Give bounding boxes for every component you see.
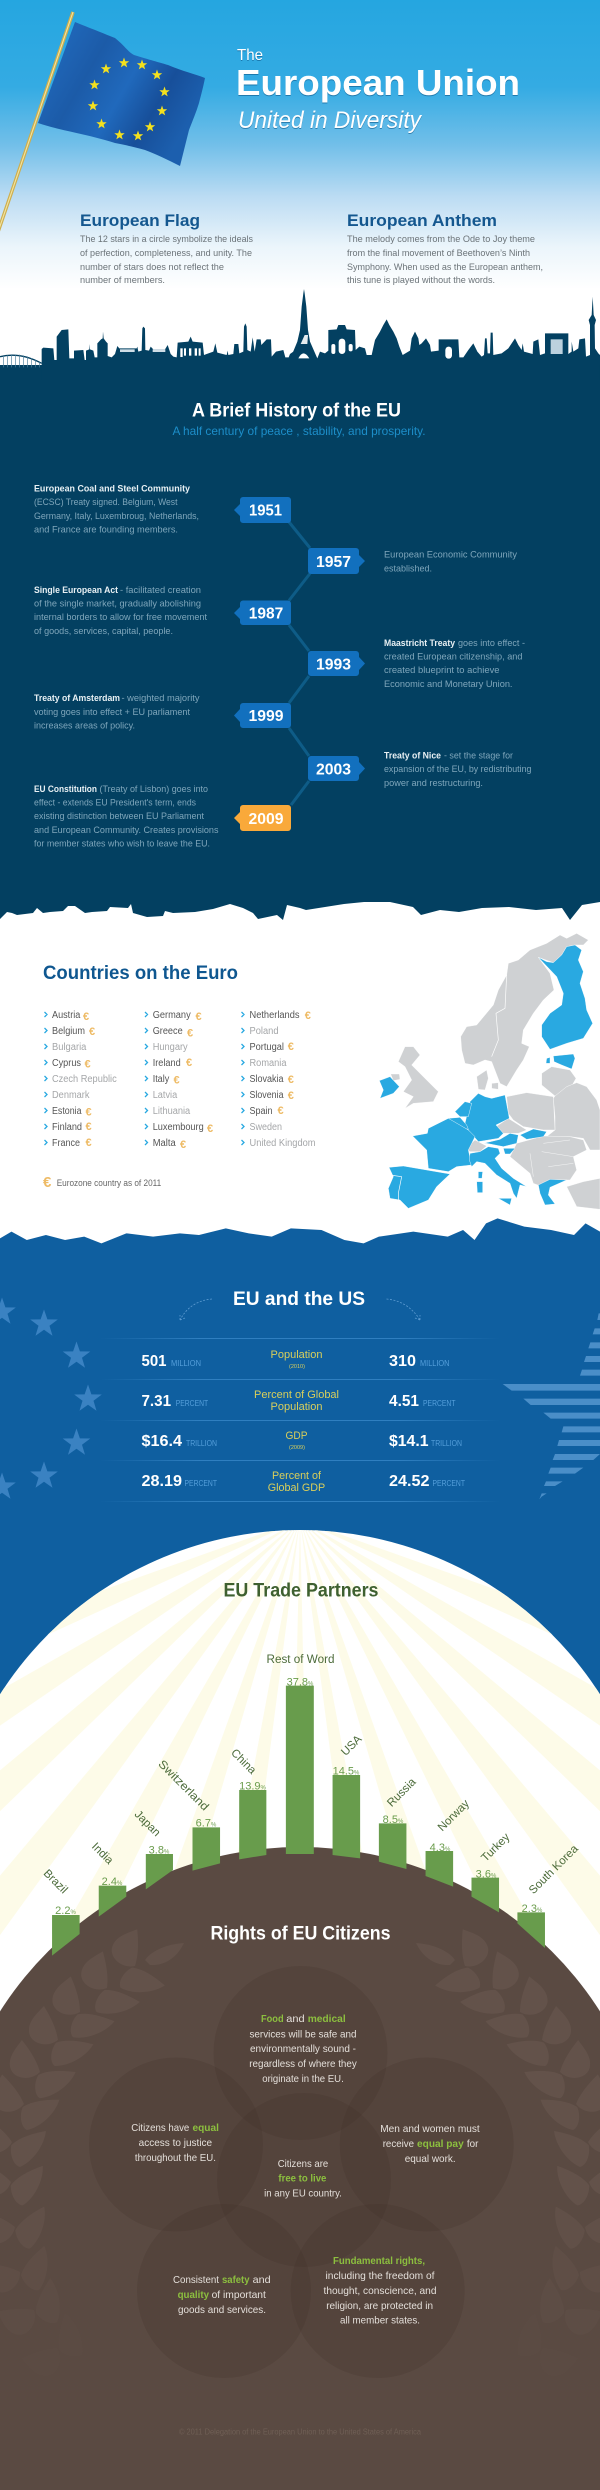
row: population: MILLION — [420, 1358, 450, 1368]
country column 1: € — [86, 1121, 92, 1133]
bar labels: Norway — [436, 1798, 472, 1834]
year marker: 1993: 1993 — [316, 656, 351, 674]
row: percent of global population — [142, 1389, 456, 1413]
text: food and medical: medical — [308, 2013, 346, 2025]
text block: European Anthem: European Anthem — [347, 211, 497, 230]
row: population — [142, 1349, 450, 1370]
text: free to live: free to live — [278, 2172, 327, 2184]
text block: European Flag: number of stars does not reflect the — [80, 262, 224, 273]
heading: A Brief History of the EU — [192, 400, 401, 422]
text block: European Anthem: this tune is played without the words. — [347, 275, 495, 286]
bar labels: Rest of Word — [266, 1654, 334, 1666]
text: Treaty of Amsterdam 1999: voting goes into effect + EU parliament — [34, 707, 190, 718]
text: equal justice: equal — [192, 2122, 219, 2134]
list chevrons — [44, 1012, 244, 1145]
venn circles — [89, 1966, 514, 2378]
country column 3: Slovakia — [250, 1074, 284, 1085]
country column 3: Romania — [250, 1058, 287, 1069]
text: fundamental rights: including the freedom of — [326, 2270, 435, 2282]
country column 1: Estonia — [52, 1106, 82, 1117]
text: fundamental rights: thought, conscience, and — [324, 2285, 437, 2297]
year marker: 1999: 1999 — [248, 708, 284, 725]
row: percent of global population: 4.51 — [389, 1393, 419, 1410]
text: equal pay — [380, 2123, 480, 2165]
text: Treaty of Nice 2003 — [384, 750, 532, 789]
text: Single European Act 1987: Single European Act — [34, 585, 119, 596]
panel: EU and the US — [0, 1289, 600, 1502]
country column 1: € — [84, 1058, 91, 1070]
row: GDP: TRILLION — [186, 1438, 217, 1448]
panel: EU trade partners — [41, 1580, 581, 1956]
text: equal pay: equal work. — [405, 2153, 456, 2165]
text: Maastricht Treaty 1993: goes into effect - — [458, 638, 525, 649]
country column 1: Cyprus — [52, 1058, 81, 1069]
country column 2: Malta — [153, 1138, 176, 1149]
title: United in Diversity — [238, 107, 423, 134]
text: Single European Act 1987: of goods, services, capital, people. — [34, 626, 173, 637]
bar values: 6.7% — [196, 1818, 217, 1830]
text block: European Anthem — [347, 211, 543, 286]
country column 1: Belgium — [52, 1026, 85, 1037]
year marker: 1987: 1987 — [249, 606, 283, 622]
year marker: 1957 — [308, 548, 365, 574]
text block: European Flag: number of members. — [80, 275, 165, 286]
title — [236, 47, 520, 134]
year marker: 2003: 2003 — [316, 762, 351, 778]
text: equal justice: Citizens have — [131, 2122, 189, 2134]
bar labels: Turkey — [479, 1831, 513, 1864]
text: EU Constitution 2009: effect - extends EU President's term, ends — [34, 798, 196, 808]
title: European Union — [236, 62, 520, 103]
country column 3: Poland — [250, 1026, 278, 1037]
heading: EU Trade Partners — [224, 1580, 378, 1602]
row: percent of global population: 7.31 — [142, 1393, 171, 1410]
text: EU Constitution 2009: EU Constitution — [34, 784, 97, 795]
country column 1: € — [83, 1011, 89, 1023]
footer credit: © 2011 Delegation of the European Union to the United States of America — [179, 2428, 422, 2436]
bar chart — [52, 1686, 545, 1956]
year marker: 2009 — [234, 805, 291, 831]
heading: Countries on the Euro — [43, 963, 238, 984]
text: safety and quality: goods and services. — [178, 2304, 266, 2316]
country column 2: € — [180, 1139, 186, 1151]
text: food and medical — [249, 2013, 357, 2085]
country column 3: Spain — [250, 1106, 272, 1117]
text: equal justice: access to justice — [139, 2137, 212, 2149]
map of Europe — [379, 933, 600, 1209]
table row lines — [100, 1338, 500, 1502]
text: Treaty of Nice 2003: - set the stage for — [444, 750, 513, 762]
bar labels: USA — [339, 1733, 365, 1758]
row: population: Population — [270, 1349, 322, 1361]
text: food and medical: environmentally sound - — [250, 2043, 356, 2055]
text: Single European Act 1987: internal borders to allow for free movement — [34, 612, 207, 623]
bar labels: Switzerland — [156, 1758, 211, 1813]
row: population: MILLION — [171, 1358, 201, 1368]
text: fundamental rights: Fundamental rights, — [333, 2255, 425, 2267]
year marker: 2009: 2009 — [248, 811, 284, 828]
text: Treaty of Nice 2003: expansion of the EU, by redistributing — [384, 764, 532, 775]
bar labels: India — [89, 1841, 116, 1867]
bar values: 4.3% — [430, 1842, 451, 1854]
text: equal justice — [131, 2122, 219, 2164]
panel: rights of EU citizens — [0, 1924, 600, 2436]
text: fundamental rights: religion, are protected in — [326, 2300, 433, 2312]
bar labels — [41, 1654, 581, 1897]
bar values: 3.8% — [149, 1844, 170, 1856]
row: percent of global population: PERCENT — [176, 1398, 208, 1408]
country column 3: € — [288, 1074, 294, 1086]
legend — [43, 1174, 161, 1191]
row: GDP: TRILLION — [431, 1438, 462, 1448]
text: Maastricht Treaty 1993: created European citizenship, and — [384, 652, 522, 662]
country column 3: € — [278, 1105, 284, 1117]
row: GDP: $16.4 — [142, 1433, 182, 1450]
text: equal pay: Men and women must — [380, 2123, 480, 2135]
country column 2: Luxembourg — [153, 1122, 204, 1133]
country column 1: Finland — [52, 1122, 82, 1133]
non-euro countries — [391, 933, 600, 1209]
year marker: 1957: 1957 — [316, 554, 351, 571]
text: ECSC 1951: and France are founding members. — [34, 524, 178, 536]
text: ECSC 1951 — [34, 484, 199, 536]
text: ECSC 1951: Germany, Italy, Luxembroug, Netherlands, — [34, 511, 199, 522]
row: GDP — [142, 1430, 462, 1451]
text: equal pay: for — [467, 2138, 479, 2150]
country column 3 — [250, 1010, 316, 1149]
year marker: 2003 — [308, 756, 365, 781]
text: Single European Act 1987: - facilitated creation — [120, 585, 201, 596]
legend: € — [43, 1174, 52, 1191]
text: Maastricht Treaty 1993: Economic and Monetary Union. — [384, 679, 512, 690]
bar values: 2.2% — [55, 1905, 76, 1917]
bar values: 14.5% — [333, 1766, 360, 1778]
bar labels: Japan — [132, 1809, 162, 1839]
heading: Rights of EU Citizens — [210, 1924, 390, 1944]
text: EEC 1957: European Economic Community — [384, 550, 517, 560]
text: safety and quality: safety — [222, 2274, 250, 2286]
country column 1: Czech Republic — [52, 1074, 117, 1085]
text: EEC 1957 — [384, 550, 517, 574]
bar values — [55, 1676, 543, 1917]
row: percent of global GDP — [142, 1470, 465, 1494]
country column 1 — [52, 1010, 117, 1149]
bar values: 2.4% — [102, 1876, 123, 1888]
text: Treaty of Nice 2003: Treaty of Nice — [384, 750, 441, 762]
country column 2: Latvia — [153, 1090, 178, 1101]
row: percent of global GDP: PERCENT — [184, 1478, 217, 1488]
bar values: 2.3% — [522, 1903, 543, 1915]
text block: European Flag: European Flag — [80, 211, 200, 230]
country column 2: Italy — [153, 1074, 169, 1085]
bar values: 8.5% — [383, 1814, 404, 1826]
row: percent of global population: Population — [270, 1401, 322, 1413]
country column 3: Portugal — [250, 1042, 284, 1053]
year marker: 1951 — [234, 497, 291, 523]
bar labels: Brazil — [41, 1867, 70, 1896]
text: ECSC 1951: European Coal and Steel Community — [34, 484, 191, 494]
country column 1: Bulgaria — [52, 1042, 87, 1053]
text: EU Constitution 2009: existing distinction between EU Parliament — [34, 811, 204, 822]
row: percent of global GDP: Global GDP — [268, 1482, 325, 1494]
bar labels: China — [228, 1747, 258, 1777]
arrow: to US — [386, 1299, 420, 1320]
text: Single European Act 1987: of the single market, gradually abolishing — [34, 598, 201, 610]
text: fundamental rights: all member states. — [340, 2314, 420, 2326]
text: fundamental rights — [324, 2255, 437, 2326]
text: food and medical: services will be safe and — [250, 2028, 357, 2040]
row: percent of global GDP: 24.52 — [389, 1473, 430, 1490]
bar labels: South Korea — [527, 1843, 581, 1897]
row: population: 310 — [389, 1353, 416, 1370]
country column 3: € — [288, 1041, 294, 1053]
row: percent of global GDP: Percent of — [272, 1470, 322, 1482]
text: equal justice: throughout the EU. — [135, 2152, 216, 2164]
text block: European Flag — [80, 211, 253, 286]
country column 2 — [153, 1010, 213, 1151]
panel: brief history — [34, 400, 532, 850]
row: percent of global population: PERCENT — [423, 1398, 456, 1408]
wreath left — [0, 1924, 184, 2420]
text: Single European Act 1987 — [34, 585, 207, 637]
text: EU Constitution 2009 — [34, 784, 219, 850]
torn edge: dark to white — [0, 890, 600, 920]
year marker: 1951: 1951 — [249, 502, 282, 520]
text: Treaty of Amsterdam 1999: - weighted majority — [122, 693, 200, 704]
country column 3: Netherlands — [250, 1010, 300, 1021]
country column 1: € — [86, 1137, 92, 1149]
title: The — [237, 47, 263, 64]
country column 1: France — [52, 1138, 80, 1149]
text: Maastricht Treaty 1993 — [384, 638, 525, 690]
year marker: 1987 — [234, 600, 291, 625]
heading: EU and the US — [233, 1289, 365, 1310]
background stars — [0, 1298, 102, 1499]
text: Maastricht Treaty 1993: created blueprint to achieve — [384, 665, 500, 676]
country column 1: Austria — [52, 1010, 81, 1021]
text: safety and quality: and — [253, 2274, 271, 2286]
text: ECSC 1951: (ECSC) Treaty signed. Belgium, West — [34, 497, 178, 508]
text: safety and quality: quality — [178, 2289, 209, 2301]
text: safety and quality: of important — [212, 2289, 266, 2301]
text: safety and quality: Consistent — [173, 2274, 219, 2286]
country column 3: Slovenia — [250, 1090, 284, 1101]
text: EEC 1957: established. — [384, 564, 432, 574]
row: GDP: (2009) — [289, 1445, 305, 1451]
text block: European Flag: of perfection, completeness, and unity. The — [80, 248, 252, 259]
country column 2: € — [196, 1011, 202, 1023]
country column 2: Greece — [153, 1026, 183, 1037]
row: population: (2010) — [289, 1364, 305, 1370]
country column 2: Germany — [153, 1010, 191, 1021]
text: food and medical: and — [286, 2013, 305, 2025]
city skyline silhouette — [0, 289, 600, 380]
country column 2: Hungary — [153, 1042, 188, 1053]
arrow: to EU — [180, 1299, 212, 1320]
row: population: 501 — [142, 1353, 167, 1370]
country column 2: € — [174, 1074, 180, 1086]
country column 3: € — [305, 1010, 311, 1022]
text: food and medical: Food — [261, 2013, 284, 2025]
bar labels: Russia — [385, 1776, 419, 1810]
text: EU Constitution 2009: and European Community. Creates provisions — [34, 825, 219, 836]
row: percent of global population: Percent of Global — [254, 1389, 339, 1401]
text block: European Anthem: Symphony. When used as the European anthem, — [347, 262, 543, 273]
row: percent of global GDP: PERCENT — [432, 1478, 465, 1488]
country column 3: United Kingdom — [250, 1138, 316, 1149]
icon: EU flag on pole — [0, 12, 205, 232]
country column 3: Sweden — [250, 1122, 282, 1133]
row: percent of global GDP: 28.19 — [142, 1473, 182, 1490]
text: free to live: Citizens are — [278, 2158, 328, 2170]
white dome with sun rays — [0, 1530, 600, 2012]
bar values: 13.9% — [239, 1780, 267, 1792]
text block: European Anthem: from the final movement of Beethoven’s Ninth — [347, 248, 530, 259]
country column 1: Denmark — [52, 1090, 90, 1101]
text: Treaty of Amsterdam 1999: Treaty of Amsterdam — [34, 693, 120, 704]
text: free to live — [264, 2158, 342, 2200]
eurozone countries — [379, 945, 593, 1208]
subheading: A half century of peace , stability, and prosperity. — [172, 424, 426, 438]
text: EU Constitution 2009: for member states who wish to leave the EU. — [34, 838, 210, 850]
text: safety and quality — [173, 2274, 271, 2316]
country column 1: € — [86, 1106, 92, 1118]
text block: European Flag: The 12 stars in a circle symbolize the ideals — [80, 234, 253, 245]
torn edge: white to blue — [0, 1218, 600, 1260]
legend: Eurozone country as of 2011 — [57, 1178, 161, 1188]
text: food and medical: originate in the EU. — [262, 2073, 344, 2085]
brown ground dome — [0, 1847, 600, 2490]
bar values: 37.8% — [287, 1676, 314, 1688]
country column 2: € — [186, 1057, 192, 1069]
text: equal pay: equal pay — [417, 2138, 464, 2150]
text: equal pay: receive — [383, 2138, 414, 2150]
text: Treaty of Amsterdam 1999: increases areas of policy. — [34, 720, 135, 732]
timeline connectors — [289, 522, 310, 805]
year marker: 1999 — [234, 703, 291, 728]
country column 3: € — [288, 1090, 294, 1102]
text: EU Constitution 2009: (Treaty of Lisbon) goes into — [100, 784, 208, 795]
row: GDP: $14.1 — [389, 1433, 429, 1450]
country column 2: € — [187, 1028, 193, 1040]
country column 2: Ireland — [153, 1058, 181, 1069]
panel: countries on the euro — [43, 963, 316, 1191]
bar values: 3.6% — [476, 1868, 497, 1880]
year marker: 1993 — [308, 651, 365, 676]
text: Treaty of Nice 2003: power and restructuring. — [384, 778, 483, 789]
text: Maastricht Treaty 1993: Maastricht Treaty — [384, 638, 456, 649]
text: free to live: in any EU country. — [264, 2188, 342, 2200]
row: GDP: GDP — [286, 1430, 308, 1442]
country column 2: € — [207, 1123, 213, 1135]
text: food and medical: regardless of where they — [249, 2058, 357, 2070]
text: Treaty of Amsterdam 1999 — [34, 693, 200, 732]
wreath right — [416, 1924, 600, 2420]
country column 2: Lithuania — [153, 1106, 191, 1117]
text block: European Anthem: The melody comes from the Ode to Joy theme — [347, 234, 535, 245]
striped star — [503, 1313, 600, 1499]
country column 1: € — [89, 1026, 95, 1038]
